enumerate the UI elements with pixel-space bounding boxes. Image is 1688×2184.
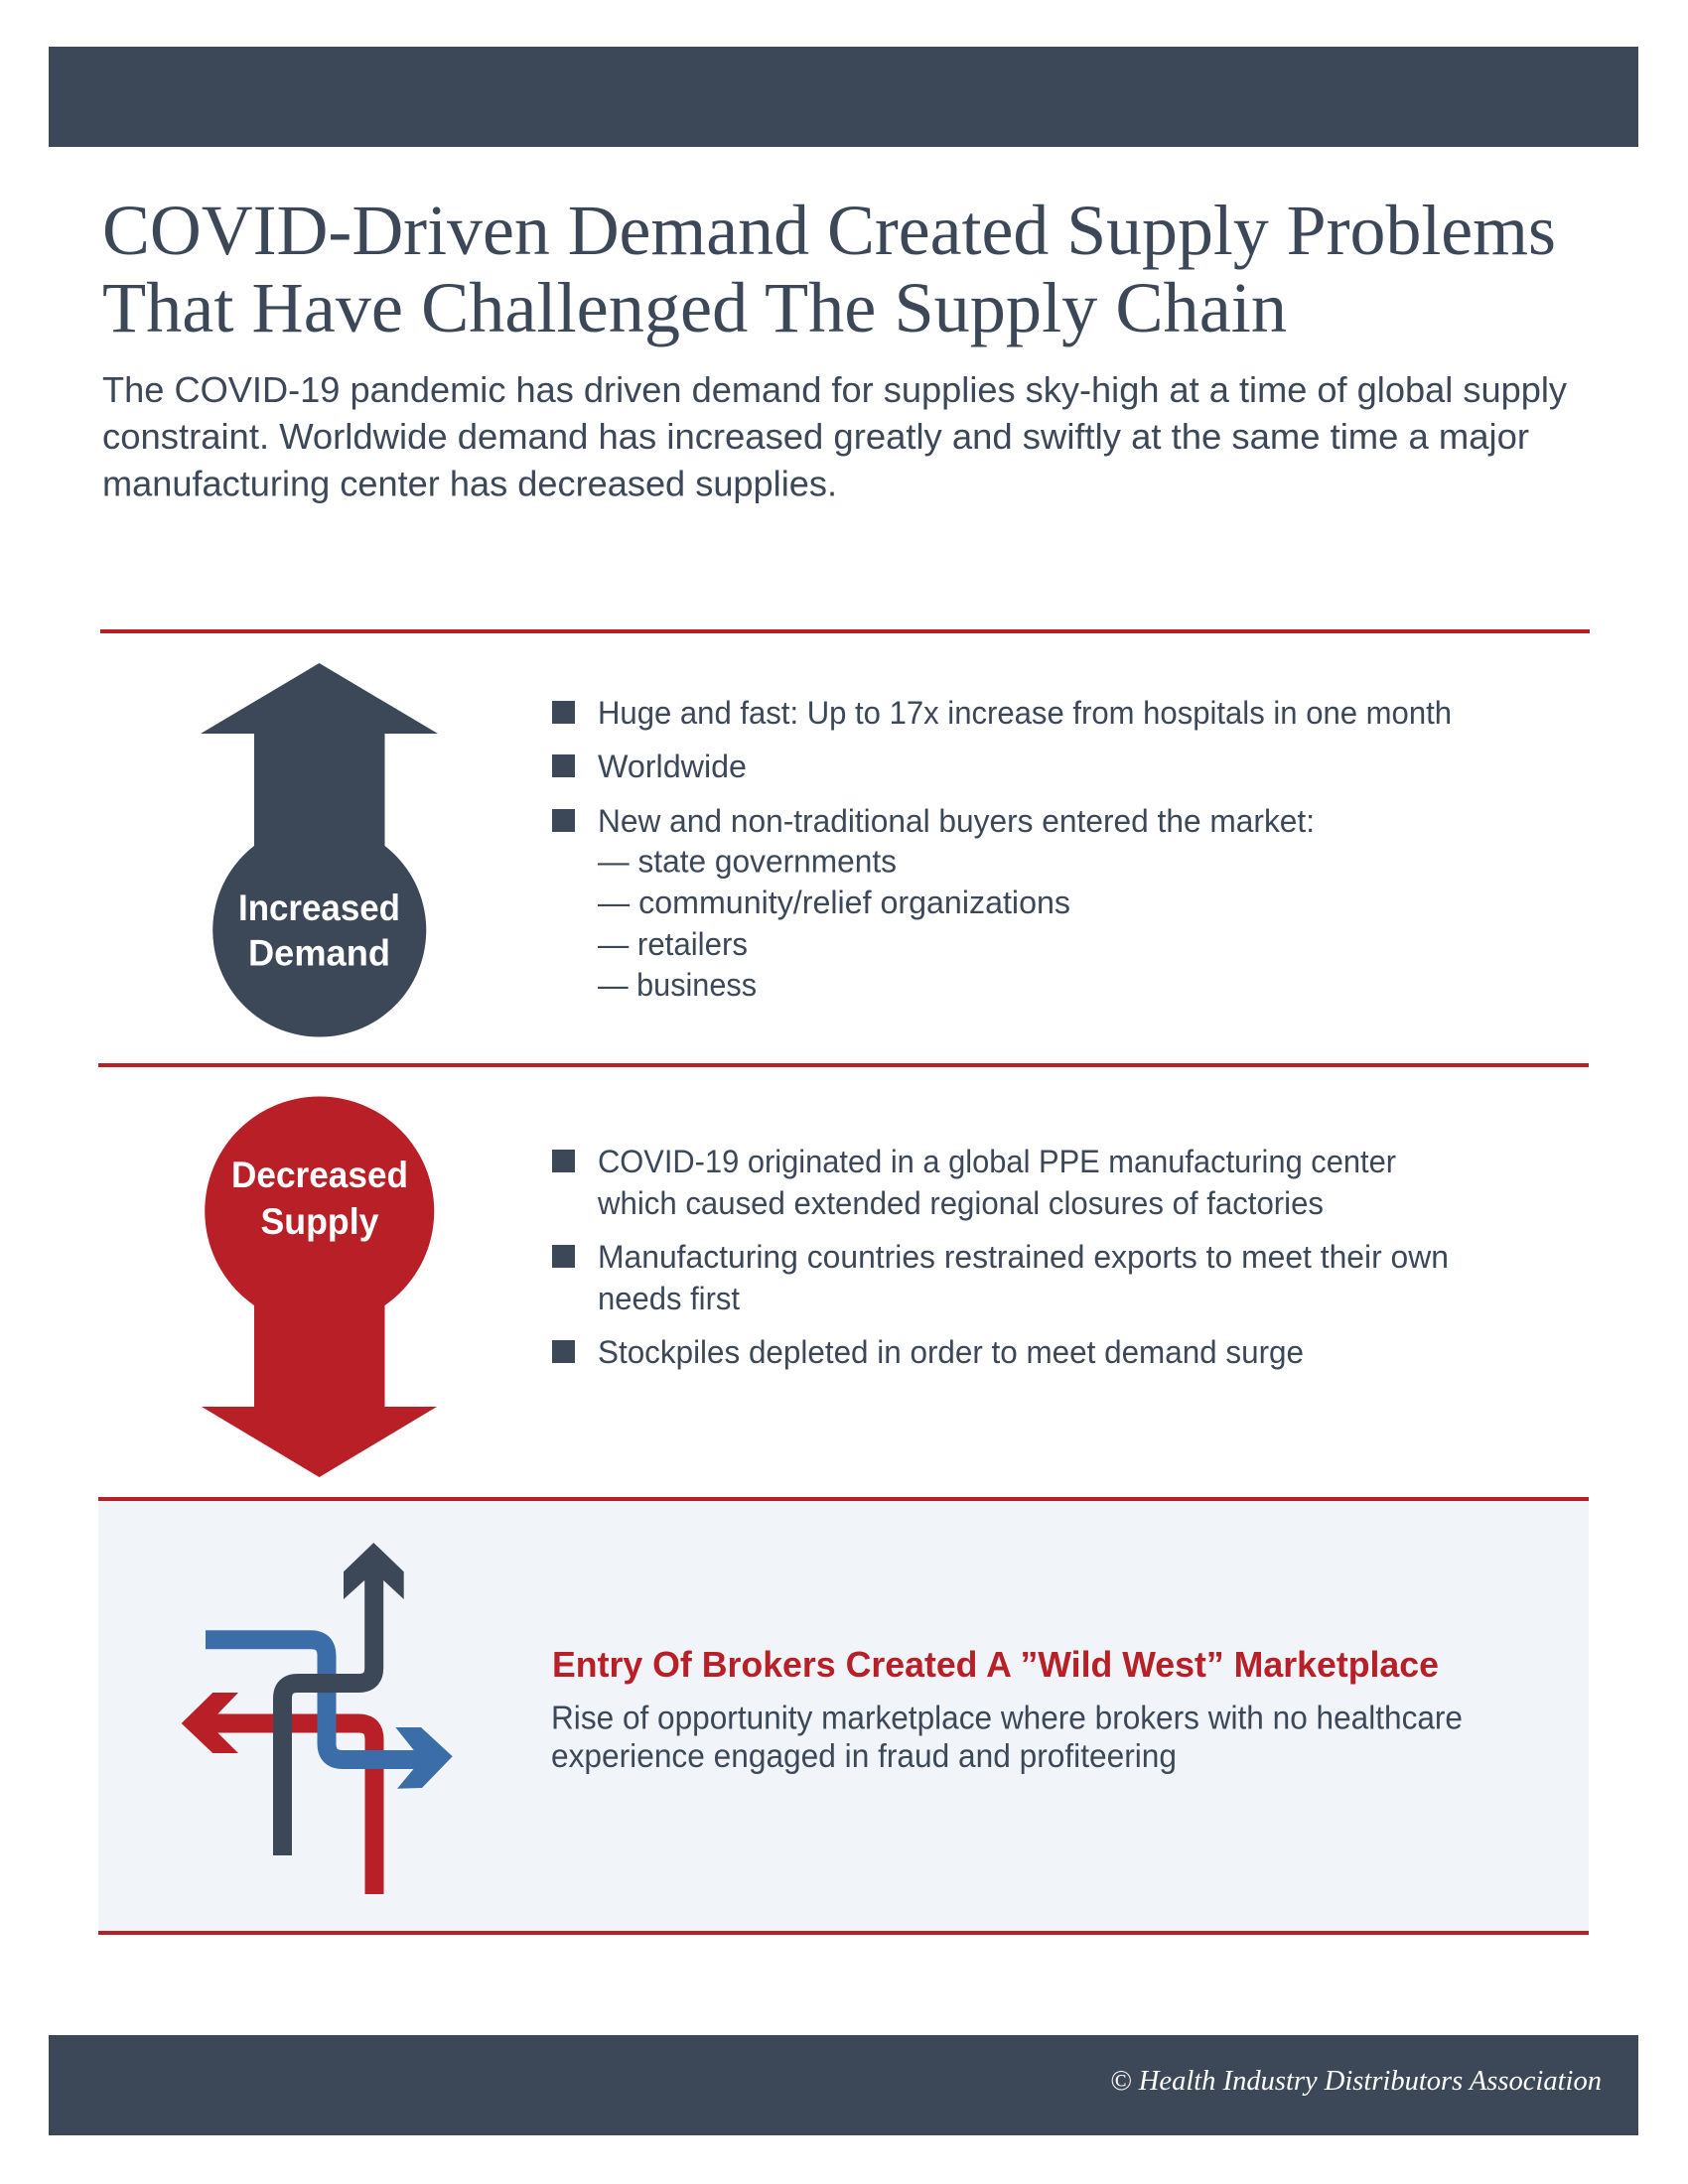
bullet list: demand: Huge and fast: Up to 17x increase from hospitals in one month — [598, 695, 1452, 731]
text: brokers description — [551, 1700, 1463, 1774]
icon: down arrow with circle: Decreased — [231, 1155, 408, 1195]
bullet list: demand: Worldwide — [598, 749, 747, 784]
intro paragraph: manufacturing center has decreased supplies. — [102, 463, 837, 504]
icon: up arrow with circle: Increased — [238, 887, 400, 928]
bullet list: demand — [552, 695, 1452, 1003]
bullet list: demand: — community/relief organizations — [598, 885, 1070, 920]
intro paragraph — [102, 369, 1567, 504]
bullet list: supply: needs first — [598, 1281, 740, 1316]
bullet list: supply: Manufacturing countries restrained exports to meet their own — [598, 1239, 1449, 1275]
bullet list: supply — [552, 1144, 1449, 1370]
title: COVID-Driven Demand Created Supply Problems — [102, 191, 1556, 270]
bullet list: supply: Stockpiles depleted in order to meet demand surge — [598, 1334, 1304, 1370]
text: brokers description: experience engaged in fraud and profiteering — [551, 1737, 1177, 1774]
header bar — [49, 47, 1638, 147]
bullet list: demand: — state governments — [598, 844, 897, 880]
text: brokers description: Rise of opportunity marketplace where brokers with no healthcare — [551, 1700, 1463, 1735]
bullet list: demand: New and non-traditional buyers entered the market: — [598, 803, 1315, 839]
panel: increased demand — [100, 629, 1590, 1037]
icon: up arrow with circle — [201, 663, 438, 1037]
footer bar — [49, 2035, 1638, 2135]
icon: down arrow with circle: Supply — [260, 1201, 379, 1242]
title: That Have Challenged The Supply Chain — [102, 268, 1287, 347]
bullet list: demand: — retailers — [598, 926, 748, 962]
panel: brokers — [98, 1497, 1589, 1935]
bullet list: supply: COVID-19 originated in a global PPE manufacturing center — [598, 1144, 1396, 1179]
panel: decreased supply — [98, 1063, 1589, 1477]
heading: wild west marketplace: Entry Of Brokers Created A ”Wild West” Marketplace — [552, 1644, 1439, 1685]
title — [102, 191, 1556, 347]
bullet list: demand: — business — [598, 967, 757, 1003]
intro paragraph: constraint. Worldwide demand has increased greatly and swiftly at the same time a major — [102, 416, 1529, 457]
icon: down arrow with circle — [202, 1097, 437, 1477]
intro paragraph: The COVID-19 pandemic has driven demand for supplies sky-high at a time of global supply — [102, 369, 1567, 410]
icon: up arrow with circle: Demand — [248, 933, 390, 973]
bullet list: supply: which caused extended regional closures of factories — [597, 1185, 1324, 1221]
footer credit: © Health Industry Distributors Association — [1110, 2065, 1602, 2097]
icon: crossing arrows — [182, 1543, 453, 1894]
